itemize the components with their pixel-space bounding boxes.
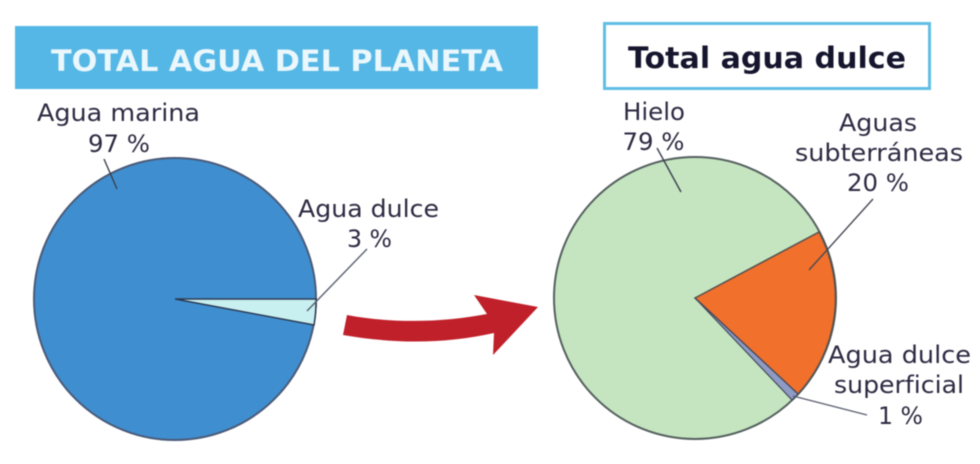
label: hielo: Hielo	[623, 98, 685, 126]
slice: agua dulce 3%	[175, 299, 316, 325]
label: agua dulce superficial: Agua dulce	[828, 341, 971, 369]
label: agua dulce	[298, 195, 439, 311]
label: agua dulce superficial	[793, 341, 971, 430]
label: agua dulce superficial: 1 %	[878, 402, 923, 430]
heading: total agua del planeta: TOTAL AGUA DEL PLANETA	[51, 44, 504, 78]
label: aguas subterraneas	[795, 109, 963, 270]
label: agua marina: 97 %	[88, 130, 150, 158]
heading: total agua dulce	[604, 24, 930, 88]
slice: agua dulce superficial 1%	[695, 298, 798, 400]
label: agua marina: Agua marina	[37, 99, 200, 127]
pie chart: fresh water	[554, 157, 836, 439]
heading: total agua dulce: Total agua dulce	[628, 41, 906, 75]
label: hielo	[622, 98, 685, 192]
label: aguas subterraneas: 20 %	[847, 169, 909, 197]
label: agua dulce: 3 %	[347, 225, 392, 253]
arrow	[343, 295, 538, 355]
pie chart: total water	[34, 158, 316, 440]
label: hielo: 79 %	[622, 128, 684, 156]
heading: total agua del planeta	[15, 26, 538, 89]
label: agua marina	[37, 99, 200, 189]
label: agua dulce superficial: superficial	[834, 371, 964, 399]
label: agua dulce: Agua dulce	[298, 195, 439, 223]
label: aguas subterraneas: Aguas	[839, 109, 917, 137]
slice: aguas subterraneas 20%	[695, 232, 836, 394]
label: aguas subterraneas: subterráneas	[795, 139, 963, 167]
